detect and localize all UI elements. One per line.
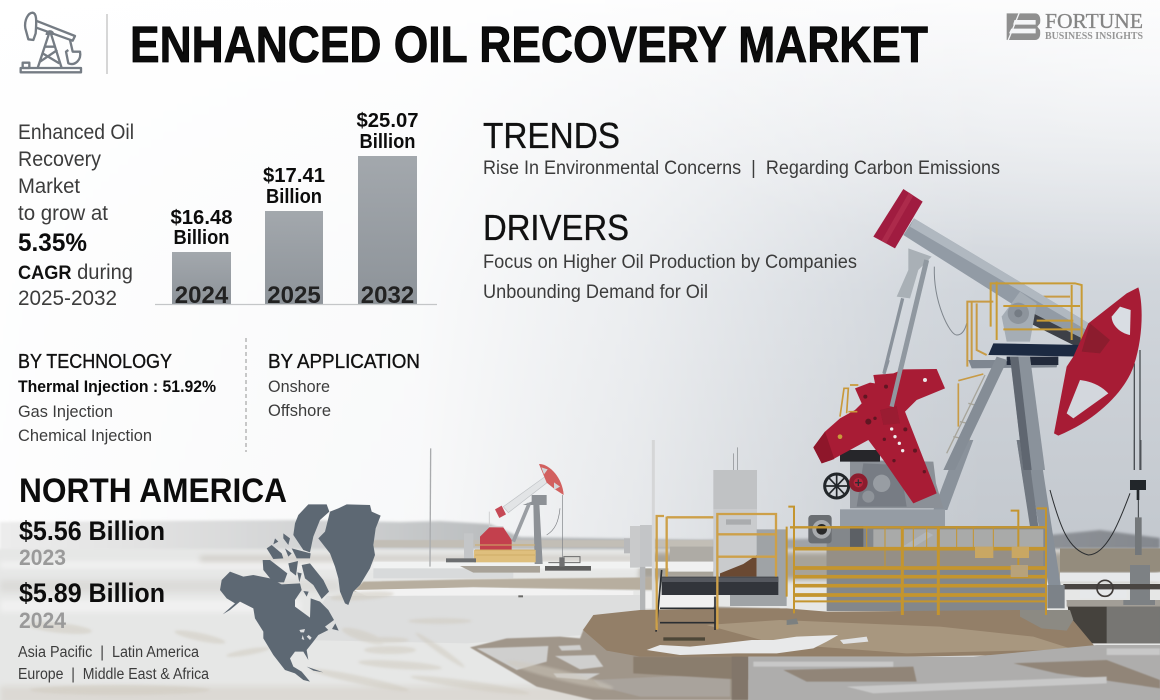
CAGR text block: 5.35% — [18, 229, 87, 257]
background wellhead — [545, 566, 591, 571]
pitman rods — [884, 298, 903, 373]
background cabinet and frame — [464, 533, 473, 558]
North America heading: NORTH AMERICA — [19, 472, 287, 510]
bar 2025: Billion — [266, 185, 322, 208]
bar 2024: $16.48 — [170, 206, 232, 229]
bar 2025 — [263, 164, 325, 309]
2023 value: $5.56 Billion — [19, 516, 165, 546]
ice foreground — [748, 645, 1160, 700]
CAGR text block: Enhanced Oil — [18, 121, 134, 144]
bar 2024: 2024 — [175, 282, 229, 309]
rods in front — [892, 360, 903, 407]
snow patch — [647, 635, 838, 655]
right equipment box — [630, 526, 640, 568]
drivers heading: DRIVERS — [483, 207, 629, 248]
bar 2032: 2032 — [361, 282, 414, 309]
rear railings — [967, 297, 1070, 367]
driver two: Unbounding Demand for Oil — [483, 281, 708, 303]
gearbox — [850, 460, 943, 508]
CAGR text block — [18, 121, 134, 310]
Arctic islands — [263, 533, 329, 599]
by technology: Gas Injection — [18, 402, 113, 421]
by technology: BY TECHNOLOGY — [18, 351, 172, 373]
title divider — [106, 14, 108, 74]
other regions — [18, 644, 209, 683]
bar 2024 — [170, 206, 232, 309]
other regions: Asia Pacific | Latin America — [18, 644, 199, 661]
CAGR text block: Market — [18, 175, 80, 198]
field behind — [1060, 548, 1160, 572]
Great Lakes — [299, 629, 312, 640]
background mound — [460, 566, 540, 573]
saddle — [897, 248, 932, 298]
pivot — [1002, 292, 1037, 342]
motor — [808, 515, 832, 543]
drivers — [483, 207, 857, 303]
walking beam — [903, 218, 1100, 353]
logo mark — [1007, 13, 1040, 41]
fence — [787, 507, 1046, 615]
CAGR text block: to grow at — [18, 202, 108, 225]
front leg lower — [933, 440, 973, 510]
bar chart — [170, 109, 418, 309]
chain — [1050, 490, 1130, 555]
gearbox and red crank — [813, 360, 945, 508]
bar 2032: Billion — [360, 130, 416, 153]
photo: distant tree line — [0, 520, 1160, 556]
bar 2024: Billion — [174, 226, 230, 249]
2023 value — [19, 516, 165, 570]
title: ENHANCED OIL RECOVERY MARKET — [130, 16, 928, 73]
Newfoundland and Caribbean — [307, 623, 339, 672]
by technology: Thermal Injection : 51.92% — [18, 378, 216, 396]
platform — [988, 343, 1083, 357]
red pulley — [849, 473, 868, 492]
stair platform — [662, 577, 778, 595]
2024 value: $5.89 Billion — [19, 578, 165, 608]
cabinet — [713, 470, 757, 509]
crank holes — [923, 378, 927, 382]
trends — [483, 115, 1000, 179]
background horsehead — [539, 464, 564, 495]
main pump jack upper structure — [873, 189, 1142, 470]
bar 2032 — [356, 109, 418, 309]
base — [840, 509, 945, 526]
logo: Fortune Business Insights — [1007, 9, 1143, 42]
bar 2025: $17.41 — [263, 164, 325, 187]
other regions: Europe | Middle East & Africa — [18, 666, 209, 683]
Ellesmere Island — [293, 504, 329, 552]
trends text: Rise In Environmental Concerns | Regarding Carbon Emissions — [483, 157, 1000, 179]
main pump jack lower structure — [583, 440, 1160, 700]
by application: Offshore — [268, 401, 331, 420]
wellhead — [1134, 440, 1141, 470]
title icon: pump jack — [21, 13, 81, 72]
CAGR text block: Recovery — [18, 148, 101, 171]
stair railings — [657, 514, 776, 630]
ground streaks — [28, 590, 615, 697]
Greenland — [318, 504, 381, 605]
top railings — [991, 282, 1082, 343]
trends heading: TRENDS — [483, 115, 620, 156]
CAGR text block: 2025-2032 — [18, 287, 117, 310]
CAGR text block: CAGR during — [18, 261, 133, 284]
concrete block — [1067, 600, 1160, 643]
background crank — [480, 527, 512, 553]
by technology: Chemical Injection — [18, 426, 152, 445]
logo name: FORTUNE — [1045, 9, 1143, 33]
bar 2032: $25.07 — [356, 109, 418, 132]
crank body — [813, 369, 945, 503]
2024 value — [19, 578, 165, 633]
flywheel — [825, 474, 849, 498]
brown foreground — [470, 607, 780, 700]
A-frame legs — [943, 357, 1007, 470]
wires — [1134, 350, 1140, 470]
2024 value: 2024 — [19, 608, 67, 633]
by application: Onshore — [268, 377, 330, 396]
rear leg lower — [1017, 440, 1061, 585]
driver one: Focus on Higher Oil Production by Companies — [483, 251, 857, 273]
background pump jack — [430, 448, 640, 573]
small railing — [840, 385, 858, 417]
tail counterweight — [873, 189, 923, 248]
by application: BY APPLICATION — [268, 351, 420, 373]
photo: frozen field — [0, 540, 1160, 700]
ladder — [947, 375, 985, 453]
background beam — [503, 477, 548, 513]
Mainland — [220, 572, 334, 682]
horsehead — [1054, 287, 1142, 436]
2023 value: 2023 — [19, 545, 66, 570]
middle ground bands — [300, 540, 780, 700]
background fence — [474, 550, 536, 562]
icon: North America map — [220, 504, 381, 682]
by application — [268, 351, 420, 420]
background pole — [428, 448, 433, 567]
bar 2025: 2025 — [267, 282, 321, 309]
by technology — [18, 351, 216, 445]
dirt mound — [583, 608, 1098, 657]
logo tagline: BUSINESS INSIGHTS — [1045, 31, 1143, 42]
